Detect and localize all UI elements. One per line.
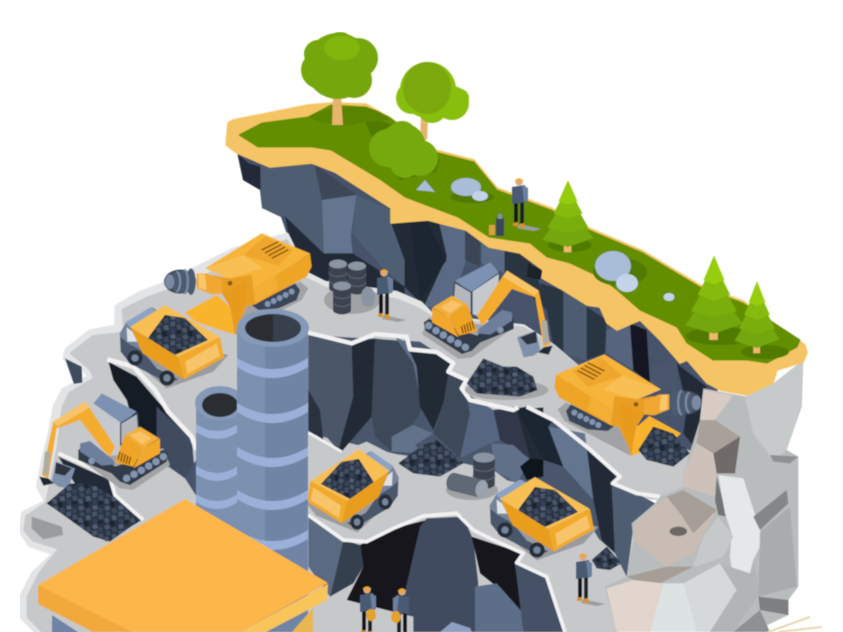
excavator pit rim bbox=[58, 453, 143, 520]
quarry floor: grey driving surface bbox=[25, 241, 690, 632]
machine: right drilling tunneller bbox=[554, 354, 702, 456]
pine trees bbox=[542, 180, 780, 353]
bush in front of the trees bbox=[369, 121, 438, 178]
large silo bbox=[237, 309, 309, 632]
tree: second round tree bbox=[396, 62, 469, 140]
lower pit rim bbox=[308, 513, 565, 632]
coal pile left bbox=[47, 483, 140, 542]
grass boulders bbox=[416, 178, 674, 301]
truck: centre dump truck, mirrored bbox=[303, 449, 399, 532]
topsoil band bbox=[226, 103, 807, 395]
quarry floor: light outer rim bbox=[20, 235, 690, 632]
machine: left drilling tunneller bbox=[164, 233, 312, 335]
middle terrace floor bbox=[308, 432, 623, 632]
processing building bbox=[38, 499, 328, 632]
stacked oil barrels bbox=[324, 260, 380, 314]
small silo bbox=[195, 386, 245, 533]
workers with jackhammers bbox=[360, 586, 409, 632]
excavator: upper right bbox=[422, 262, 553, 359]
lower pit bbox=[308, 513, 565, 632]
worker on the grass bbox=[512, 178, 541, 231]
lower pit floor bbox=[313, 600, 413, 632]
coal pile in the centre bbox=[398, 440, 463, 477]
cliff of pale rock on the right bbox=[605, 360, 803, 632]
truck: right dump truck with coal bbox=[489, 477, 598, 560]
grass shadows bbox=[308, 107, 789, 359]
truck: left dump truck with coal bbox=[119, 305, 228, 388]
small surveying gear bbox=[489, 214, 504, 236]
small coal pile bbox=[592, 547, 622, 570]
coal pile under upper excavator bbox=[465, 358, 548, 400]
coal pile in front of right tunneller bbox=[638, 427, 690, 467]
tree: large round tree bbox=[301, 32, 378, 125]
upper left pit wall bbox=[108, 362, 195, 478]
side notch bbox=[65, 358, 82, 384]
central pit between the terraces bbox=[308, 335, 655, 577]
excavator: lower left bbox=[39, 393, 170, 490]
rail tracks at the bottom right bbox=[768, 617, 822, 632]
small roof at the bottom bbox=[440, 622, 472, 632]
rims of the central pit bbox=[308, 333, 518, 452]
pale boulder wall on the middle terrace bbox=[392, 425, 433, 453]
pits on the left side of the quarry bbox=[32, 358, 240, 542]
rock wall behind the mining terraces bbox=[237, 150, 720, 470]
worker on the right terrace bbox=[576, 553, 605, 606]
grass strip bbox=[239, 105, 800, 363]
upper left pit rim bbox=[107, 359, 197, 450]
excavator pit wall bbox=[47, 457, 142, 542]
wall behind the towers bbox=[185, 453, 240, 537]
worker by barrels bbox=[377, 269, 406, 322]
floor tyre mark bbox=[32, 517, 63, 539]
centre barrels bbox=[445, 453, 498, 500]
